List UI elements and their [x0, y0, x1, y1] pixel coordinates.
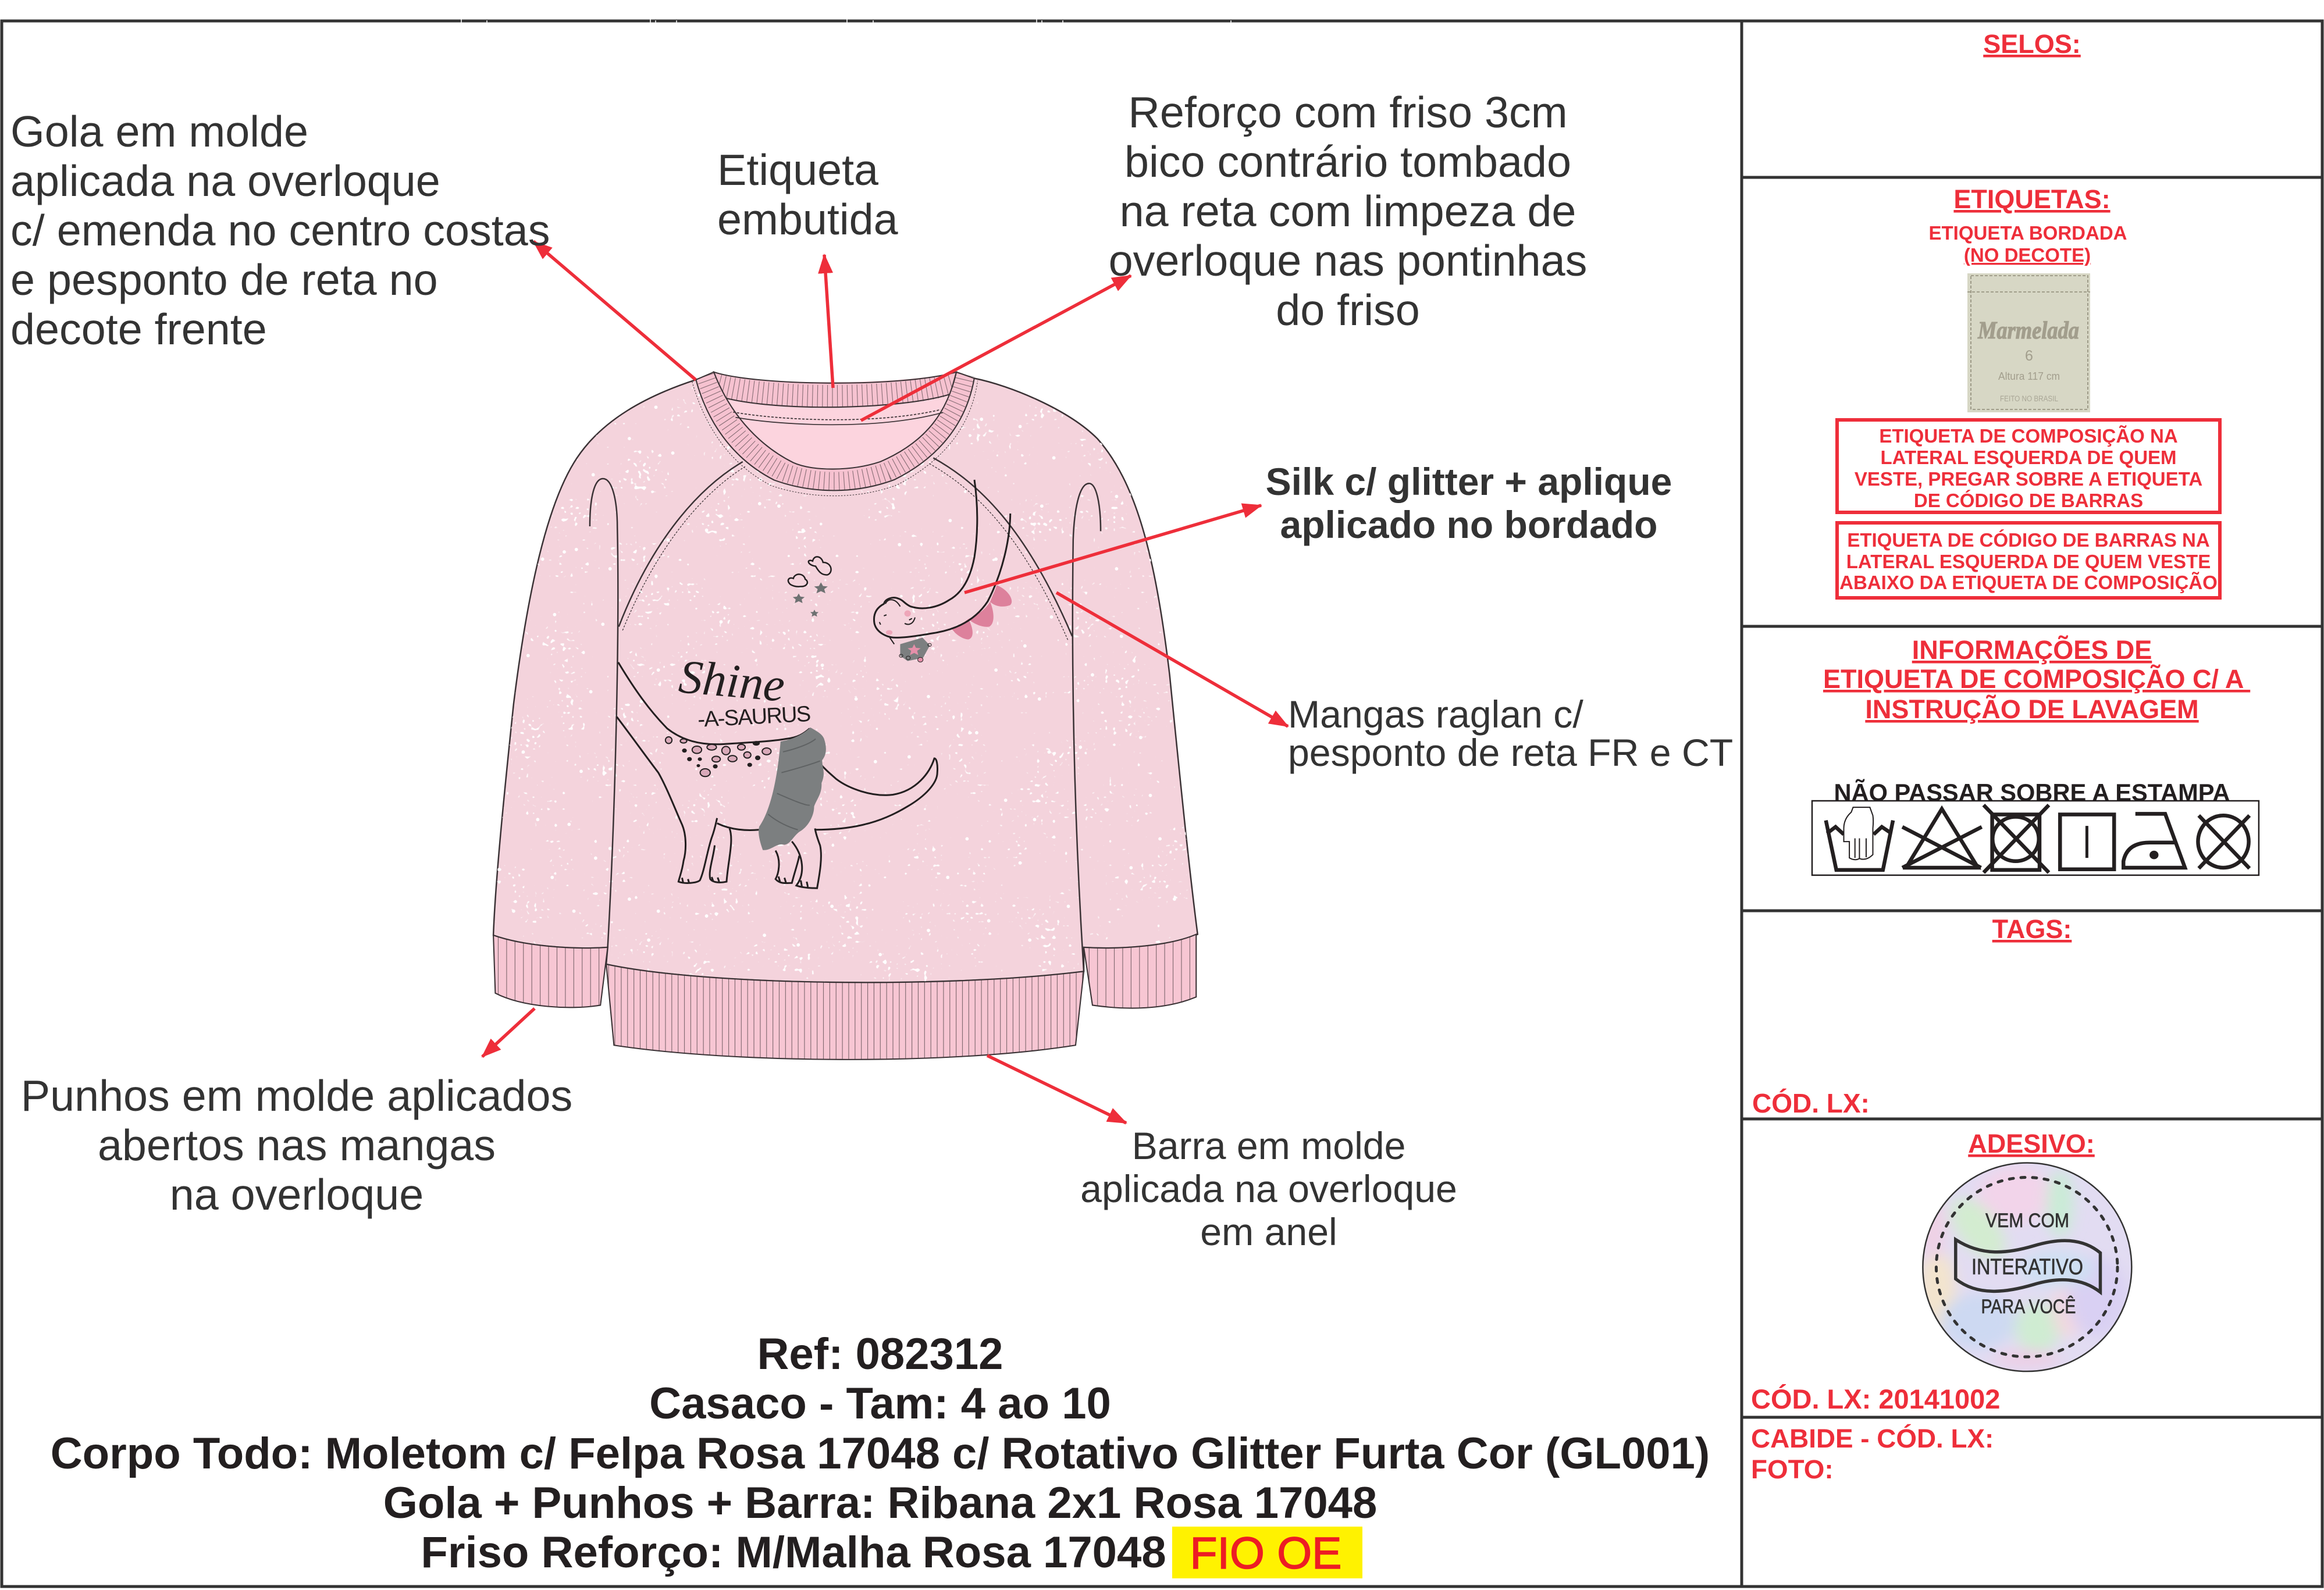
icon: no bleach: [1902, 809, 1982, 868]
panel: etiquetas: ETIQUETAS:: [1953, 184, 2111, 214]
panel: cabide e foto: FOTO:: [1751, 1454, 1834, 1484]
collar front rib: [692, 372, 978, 496]
note: gola: c/ emenda no centro costas: [10, 206, 550, 255]
panel: selos: SELOS:: [1983, 29, 2081, 59]
product specification block: Casaco - Tam: 4 ao 10: [649, 1379, 1111, 1428]
panel: adesivo: INTERATIVO: [1971, 1255, 2083, 1279]
neck interior: [714, 372, 956, 469]
note: etiqueta embutida: [717, 145, 898, 244]
clouds and stars: [788, 557, 831, 616]
product specification block: Gola + Punhos + Barra: Ribana 2x1 Rosa 17048: [383, 1478, 1377, 1528]
note: mangas: [1288, 693, 1733, 775]
product specification block: Ref: 082312: [757, 1329, 1003, 1379]
callout: código de barras: ABAIXO DA ETIQUETA DE COMPOSIÇÃO: [1839, 572, 2218, 593]
woven label: FEITO NO BRASIL: [2000, 394, 2058, 403]
holographic sticker: [1919, 1163, 2131, 1371]
note: barra: aplicada na overloque: [1080, 1168, 1457, 1211]
note: reforço: na reta com limpeza de: [1120, 187, 1576, 236]
note: barra: [1080, 1125, 1457, 1254]
icon: hand wash: [1826, 807, 1893, 870]
panel: cabide e foto: [1751, 1423, 1994, 1484]
panel: informações de composição: NÃO PASSAR SOBRE A ESTAMPA: [1834, 779, 2230, 806]
panel: adesivo: PARA VOCÊ: [1981, 1296, 2076, 1318]
panel: tags: CÓD. LX:: [1752, 1088, 1870, 1118]
note: silk: Silk c/ glitter + aplique: [1266, 460, 1672, 503]
callout: composição: LATERAL ESQUERDA DE QUEM: [1880, 447, 2177, 468]
woven label: Marmelada: [1977, 318, 2079, 344]
print: dinosaur artwork: [617, 480, 1012, 888]
note: punhos: Punhos em molde aplicados: [21, 1071, 572, 1120]
woven label: 6: [2025, 348, 2033, 364]
note: mangas: pesponto de reta FR e CT: [1288, 732, 1733, 775]
callout: composição: ETIQUETA DE COMPOSIÇÃO NA: [1879, 425, 2178, 447]
panel: adesivo: CÓD. LX: 20141002: [1751, 1384, 2000, 1414]
collar back rib: [714, 372, 956, 407]
note: mangas: Mangas raglan c/: [1288, 693, 1583, 736]
panel: tags: TAGS:: [1992, 914, 2072, 944]
note: punhos: [21, 1071, 572, 1219]
reinforcement tape stitching: [733, 409, 943, 425]
product specification block: [51, 1329, 1710, 1578]
note: gola: aplicada na overloque: [10, 156, 440, 205]
note: punhos: abertos nas mangas: [98, 1121, 496, 1170]
panel: tags: [1752, 914, 2072, 1118]
sweater illustration: [489, 366, 1204, 1060]
note: gola: decote frente: [10, 305, 267, 354]
icon: iron low: [2123, 814, 2185, 868]
product specification block: Corpo Todo: Moletom c/ Felpa Rosa 17048 c/ Rotativo Glitter Furta Cor (GL001): [51, 1429, 1710, 1478]
note: reforço: do friso: [1276, 286, 1420, 334]
note: punhos: na overloque: [170, 1170, 423, 1219]
dinosaur body outline: [617, 662, 937, 888]
note: reforço: Reforço com friso 3cm: [1128, 88, 1568, 137]
right cuff rib: [1080, 935, 1201, 1008]
dinosaur spines: [951, 585, 1012, 640]
note: reforço: [1109, 88, 1587, 334]
divider row lines: [1742, 177, 2322, 1417]
icon: drip dry: [2060, 815, 2114, 869]
care symbols: [1812, 801, 2259, 875]
annotation arrows: [482, 241, 1288, 1123]
callout: código de barras: [1837, 523, 2220, 598]
print lettering A-SAURUS: -A-SAURUS: [697, 702, 812, 732]
note: silk: [1266, 460, 1672, 546]
panel: etiquetas: ETIQUETA BORDADA: [1929, 222, 2127, 244]
panel: cabide e foto: CABIDE - CÓD. LX:: [1751, 1423, 1994, 1453]
note: barra: em anel: [1200, 1211, 1337, 1254]
fabric glitter speckles: [489, 366, 1204, 993]
note: gola: e pesponto de reta no: [10, 255, 438, 304]
dinosaur back spots: [665, 737, 771, 776]
note: etiqueta embutida: embutida: [717, 195, 898, 244]
note: reforço: overloque nas pontinhas: [1109, 236, 1587, 285]
callout: composição: DE CÓDIGO DE BARRAS: [1914, 490, 2143, 511]
panel: adesivo: [1751, 1129, 2131, 1414]
raglan seams and sleeve lines: [590, 458, 1101, 971]
dinosaur tutu skirt: [759, 728, 826, 850]
sweater body and sleeves: [493, 378, 1198, 982]
panel: etiquetas: (NO DECOTE): [1964, 244, 2091, 266]
panel: informações de composição: INSTRUÇÃO DE LAVAGEM: [1865, 694, 2199, 724]
bottom hem rib: [596, 964, 1092, 1060]
note: etiqueta embutida: Etiqueta: [717, 145, 878, 194]
icon: do not tumble dry: [1984, 805, 2049, 872]
panel: informações de composição: INFORMAÇÕES DE: [1912, 635, 2152, 665]
note: reforço: bico contrário tombado: [1124, 137, 1571, 186]
icon: no dry clean: [2198, 815, 2250, 868]
dinosaur face: [880, 600, 915, 644]
note: silk: aplicado no bordado: [1280, 503, 1658, 546]
woven label: Altura 117 cm: [1998, 370, 2060, 382]
panel: informações de composição: ETIQUETA DE COMPOSIÇÃO C/ A: [1823, 664, 2250, 694]
callout: composição: VESTE, PREGAR SOBRE A ETIQUETA: [1855, 468, 2202, 490]
dinosaur neck and head: [874, 480, 1010, 637]
print lettering Shine: Shine: [677, 650, 787, 712]
panel: adesivo: VEM COM: [1985, 1210, 2069, 1232]
note: gola: [10, 107, 550, 354]
note: barra: Barra em molde: [1132, 1125, 1405, 1168]
left cuff rib: [489, 935, 610, 1007]
dinosaur crown: [899, 637, 931, 662]
note: gola: Gola em molde: [10, 107, 308, 156]
panel: informações de composição: [1812, 635, 2259, 875]
highlight: fio OE: FIO OE: [1190, 1528, 1341, 1578]
callout: composição: [1837, 420, 2220, 512]
callout: código de barras: LATERAL ESQUERDA DE QUEM VESTE: [1846, 551, 2211, 572]
callout: código de barras: ETIQUETA DE CÓDIGO DE BARRAS NA: [1847, 529, 2210, 551]
product specification block: Friso Reforço: M/Malha Rosa 17048: [421, 1528, 1166, 1577]
panel: etiquetas: [1837, 184, 2220, 598]
panel: adesivo: ADESIVO:: [1968, 1129, 2095, 1158]
woven label: [1967, 273, 2090, 412]
